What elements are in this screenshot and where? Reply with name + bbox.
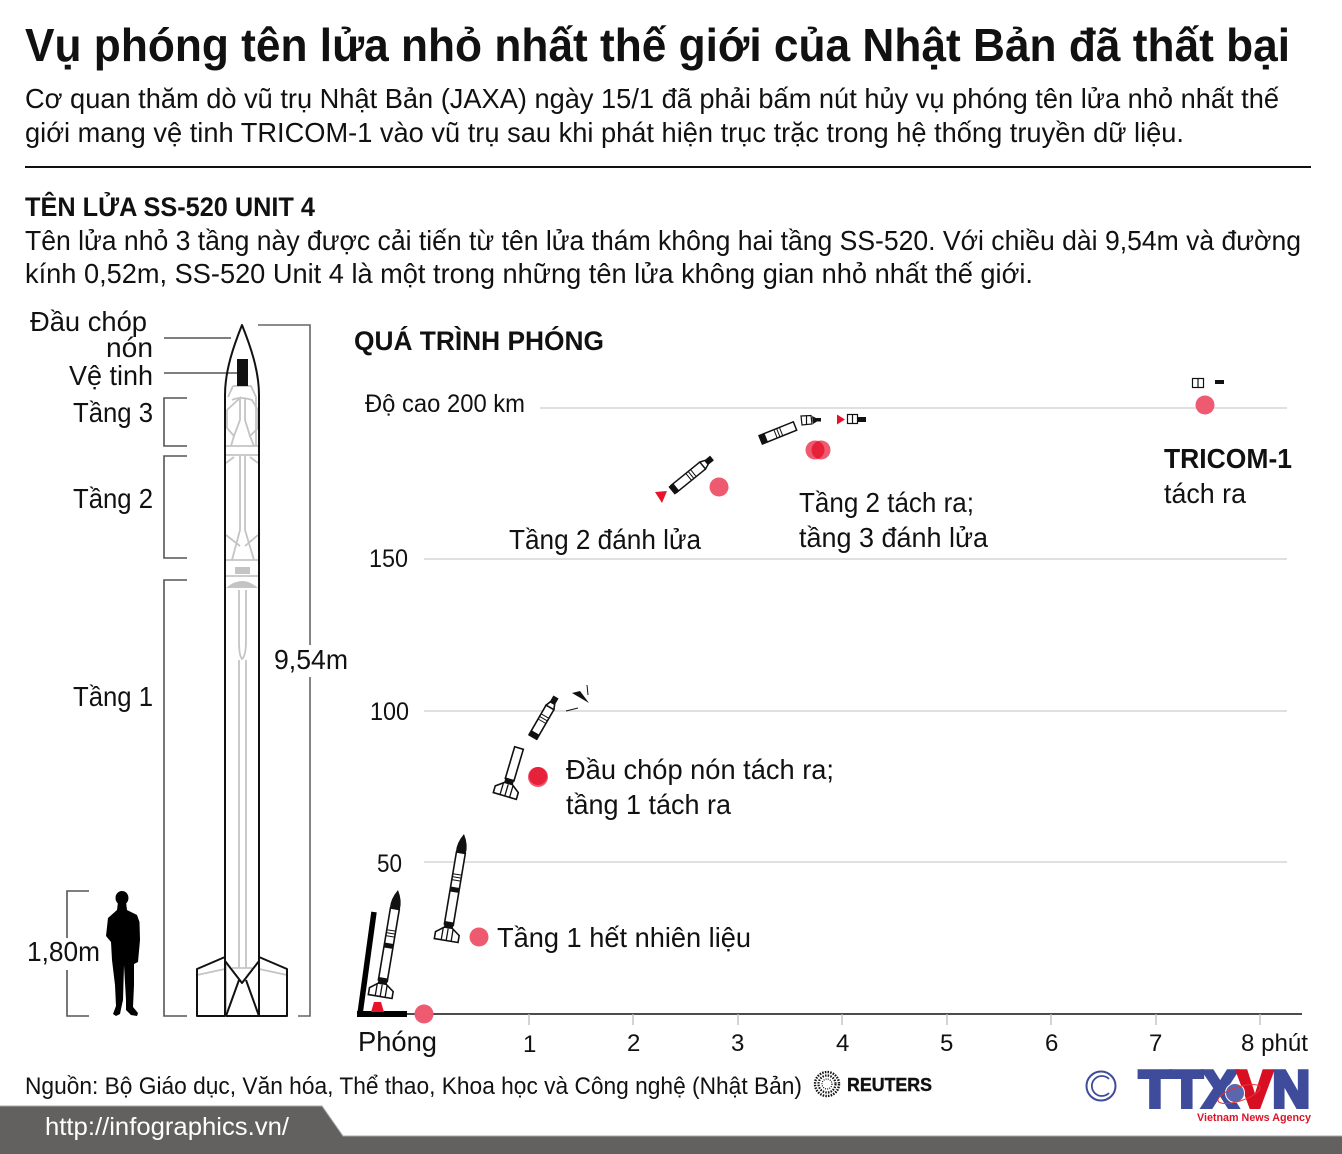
- rocket description: kính 0,52m, SS-520 Unit 4 là một trong những tên lửa không gian nhỏ nhất thế giới.: [25, 258, 1033, 289]
- x axis: 6: [1045, 1030, 1058, 1057]
- event dots: [414, 396, 1214, 1024]
- source line: Nguồn: Bộ Giáo dục, Văn hóa, Thể thao, Khoa học và Công nghệ (Nhật Bản): [25, 1073, 802, 1100]
- icon: third stage ignited: [837, 414, 866, 424]
- icon: spent first stage: [493, 745, 531, 799]
- height bracket: 1,80m: [27, 891, 100, 1016]
- x axis: 7: [1149, 1030, 1162, 1057]
- event label: TRICOM-1 separation: TRICOM-1: [1164, 443, 1292, 474]
- part labels: nón: [106, 332, 153, 363]
- event label: first stage burnout: Tầng 1 hết nhiên liệu: [497, 922, 751, 953]
- part labels: [30, 306, 153, 712]
- icon: rocket first stage burnout: [434, 832, 476, 942]
- title: Vụ phóng tên lửa nhỏ nhất thế giới của Nhật Bản đã thất bại: [25, 19, 1290, 71]
- intro paragraph: [25, 83, 1279, 148]
- Reuters logo: REUTERS: [847, 1075, 932, 1095]
- x axis: 5: [940, 1030, 953, 1057]
- rocket outline: [197, 325, 287, 1016]
- x axis: 8 phút: [1241, 1030, 1308, 1057]
- icon: spent second stage: [759, 421, 797, 444]
- y axis labels: 50: [377, 850, 402, 878]
- heading: launch process: QUÁ TRÌNH PHÓNG: [354, 325, 604, 356]
- height bracket: 9,54m: [258, 325, 348, 1016]
- heading: rocket section: TÊN LỬA SS-520 UNIT 4: [25, 190, 315, 222]
- x axis: 3: [731, 1030, 744, 1057]
- part labels: Đầu chóp: [30, 306, 147, 337]
- event label: TRICOM-1 separation: [1164, 443, 1292, 509]
- icon: third stage before ignition: [801, 416, 821, 425]
- TTXVN logo: TTXVN: [1139, 1061, 1310, 1119]
- launch pad: [357, 912, 407, 1014]
- event label: fairing and stage 1 separation: Đầu chóp nón tách ra;: [566, 754, 834, 785]
- rocket description: Tên lửa nhỏ 3 tầng này được cải tiến từ tên lửa thám không hai tầng SS-520. Với chiều dài 9,54m và đường: [25, 225, 1301, 256]
- copyright mark: [1086, 1072, 1116, 1100]
- footer bar: [0, 1106, 1342, 1154]
- part labels: Tầng 1: [73, 681, 153, 712]
- intro paragraph: Cơ quan thăm dò vũ trụ Nhật Bản (JAXA) ngày 15/1 đã phải bấm nút hủy vụ phóng tên lửa nhỏ nhất thế: [25, 83, 1279, 114]
- panel: rocket diagram: [27, 306, 348, 1016]
- y axis labels: [365, 390, 525, 878]
- icon: rocket at launch: [368, 888, 410, 998]
- event label: TRICOM-1 separation: tách ra: [1164, 478, 1246, 509]
- event label: stage 2 separation, stage 3 ignition: Tầng 2 tách ra;: [799, 487, 974, 518]
- y axis labels: 100: [370, 698, 409, 726]
- height bracket: 1,80m: 1,80m: [27, 936, 100, 967]
- x axis: [358, 1014, 1308, 1058]
- y axis labels: 150: [369, 545, 408, 573]
- intro paragraph: giới mang vệ tinh TRICOM-1 vào vũ trụ sau khi phát hiện trục trặc trong hệ thống truyền dữ liệu.: [25, 117, 1184, 148]
- part labels: Tầng 3: [73, 397, 153, 428]
- icon: human silhouette: [106, 891, 140, 1016]
- icon: second stage ignition: [655, 454, 715, 503]
- x axis: Phóng: [358, 1026, 437, 1057]
- event label: fairing and stage 1 separation: [566, 754, 834, 820]
- icon: satellite: [237, 359, 248, 386]
- rocket description: [25, 225, 1301, 289]
- x axis: 1: [523, 1031, 536, 1058]
- event label: stage 2 separation, stage 3 ignition: tầng 3 đánh lửa: [799, 522, 988, 553]
- footer bar: http://infographics.vn/: [45, 1113, 289, 1141]
- y axis labels: Độ cao 200 km: [365, 390, 525, 418]
- height bracket: 9,54m: 9,54m: [274, 644, 348, 675]
- event label: stage 2 separation, stage 3 ignition: [799, 487, 988, 553]
- part labels: Vệ tinh: [69, 360, 153, 391]
- rocket internals: [197, 386, 287, 1016]
- TTXVN logo: Vietnam News Agency: [1197, 1112, 1312, 1124]
- x axis: 2: [627, 1030, 640, 1057]
- icon: separated nose fairing: [566, 685, 589, 711]
- event label: second stage ignition: Tầng 2 đánh lửa: [509, 524, 701, 555]
- panel: launch process chart: [354, 325, 1308, 1058]
- Reuters logo: [815, 1072, 932, 1096]
- part labels: Tầng 2: [73, 483, 153, 514]
- icon: upper stages after fairing separation: [528, 694, 560, 740]
- icon: TRICOM-1 separation: [1192, 378, 1224, 388]
- x axis: 4: [836, 1030, 849, 1057]
- part brackets: [164, 338, 237, 1016]
- event label: fairing and stage 1 separation: tầng 1 tách ra: [566, 789, 731, 820]
